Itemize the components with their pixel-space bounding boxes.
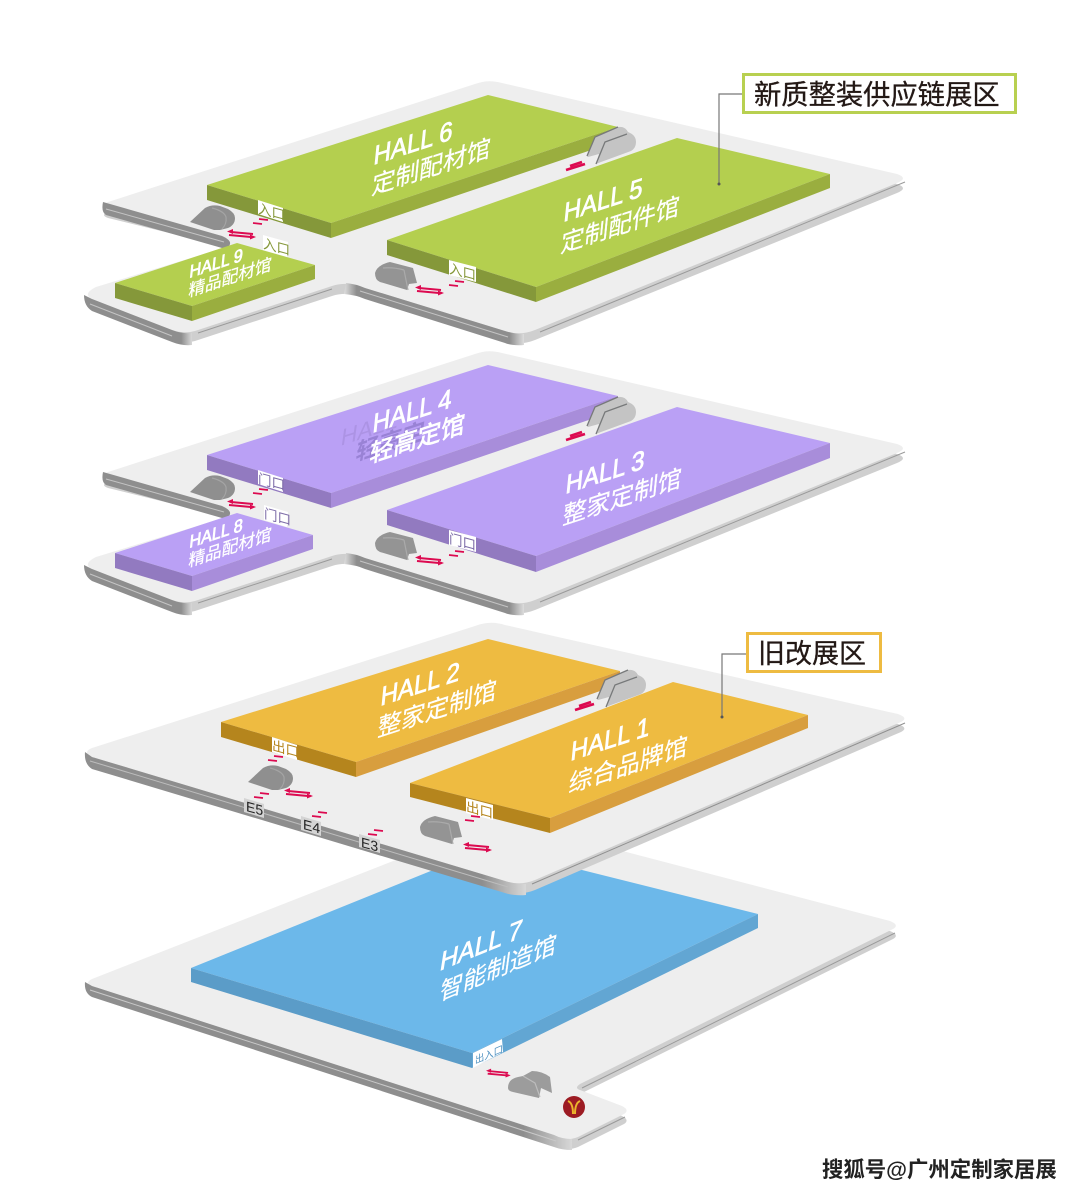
hall 3 block	[387, 407, 830, 572]
watermark: 搜狐号@广州定制家居展	[822, 1157, 1057, 1182]
hall 2 block	[221, 639, 620, 777]
door label: 出入口: 出入口	[475, 1042, 503, 1067]
door label: 入口 hall 5: 入口	[449, 261, 476, 283]
hall 6 label: 定制配材馆	[370, 134, 492, 201]
callout: 新质整装供应链展区: 新质整装供应链展区	[754, 79, 1000, 110]
icon: escalator top	[587, 127, 636, 164]
platform: level 4 base	[85, 821, 896, 1150]
icon: escalator top	[597, 670, 646, 707]
hall 6 block	[207, 95, 618, 238]
hall 8 block	[115, 513, 313, 591]
hall 5 label: HALL 5	[562, 172, 644, 228]
gate label: E4: E4	[303, 817, 320, 838]
icon: escalator hall 2 left	[248, 765, 293, 790]
door label: 门口 hall 4: 门口	[258, 471, 285, 493]
hall 4 ghost label: HALL	[339, 406, 400, 452]
hall 4 ghost label	[339, 406, 426, 467]
gate label: E3: E3	[361, 835, 378, 856]
hall 7 label: HALL 7	[438, 913, 525, 977]
icon: escalator top	[587, 397, 636, 434]
hall 4 label: 轻高定馆	[368, 410, 466, 469]
arrows: pedestrian flow	[254, 702, 594, 852]
hall 4 ghost label: 轻高定	[354, 418, 426, 467]
floor 3: orange level	[85, 623, 905, 895]
icon: escalator hall 1	[420, 816, 462, 844]
icon: escalator hall 4	[190, 475, 235, 500]
hall 4 label: HALL 4	[371, 383, 453, 439]
hall 1 label: 综合品牌馆	[567, 732, 689, 799]
icon: escalator hall 3	[375, 532, 417, 560]
hall 7 label: 智能制造馆	[438, 930, 558, 1007]
hall 1 label: HALL 1	[569, 711, 651, 767]
icon: escalator hall 5	[375, 262, 417, 290]
door label: 出口 hall 1: 出口	[466, 799, 493, 821]
hall 4 label	[368, 383, 466, 469]
gate label: E5: E5	[246, 799, 263, 820]
door label: 出口 hall 2: 出口	[272, 738, 299, 760]
hall 4 block	[207, 365, 618, 508]
hall 5 block	[387, 138, 830, 302]
hall 1 block	[410, 682, 808, 833]
door label: 入口 hall 9: 入口	[263, 236, 290, 258]
floor 1: green level	[84, 74, 1016, 345]
callout: 旧改展区	[720, 634, 880, 718]
hall 9 label: HALL 9	[189, 245, 244, 282]
hall 7 block	[191, 847, 758, 1068]
arrow: two-way	[486, 1069, 511, 1078]
icon: escalator hall 6	[190, 205, 235, 230]
platform: level 2 base	[84, 351, 905, 615]
hall 8 label: HALL 8	[189, 515, 244, 552]
hall 2 label: 整家定制馆	[376, 676, 498, 743]
arrows: pedestrian flow	[227, 432, 585, 566]
hall 5 label: 定制配件馆	[559, 192, 681, 259]
platform: level 3 base	[85, 623, 905, 895]
hall 3 label: HALL 3	[564, 444, 646, 500]
door label: 门口 hall 3: 门口	[449, 531, 476, 553]
hall 8 label: 精品配材馆	[188, 524, 273, 571]
hall 9 block	[115, 243, 315, 321]
floor 2: purple level	[84, 351, 905, 615]
hall 2 label: HALL 2	[379, 656, 461, 712]
hall 6 label: HALL 6	[372, 115, 454, 171]
hall 9 label: 精品配材馆	[188, 254, 273, 301]
callout: 旧改展区: 旧改展区	[758, 639, 866, 669]
platform: level 1 base	[84, 81, 905, 345]
door label: 入口 hall 6: 入口	[258, 201, 285, 223]
hall 3 label: 整家定制馆	[561, 464, 683, 531]
callout: 新质整装供应链展区	[718, 74, 1016, 186]
icon: escalator	[508, 1071, 552, 1098]
icon: metro logo	[563, 1096, 585, 1118]
arrows: pedestrian flow	[227, 162, 585, 296]
door label: 门口 hall 8: 门口	[264, 506, 291, 528]
floor 4: blue level	[85, 821, 896, 1150]
